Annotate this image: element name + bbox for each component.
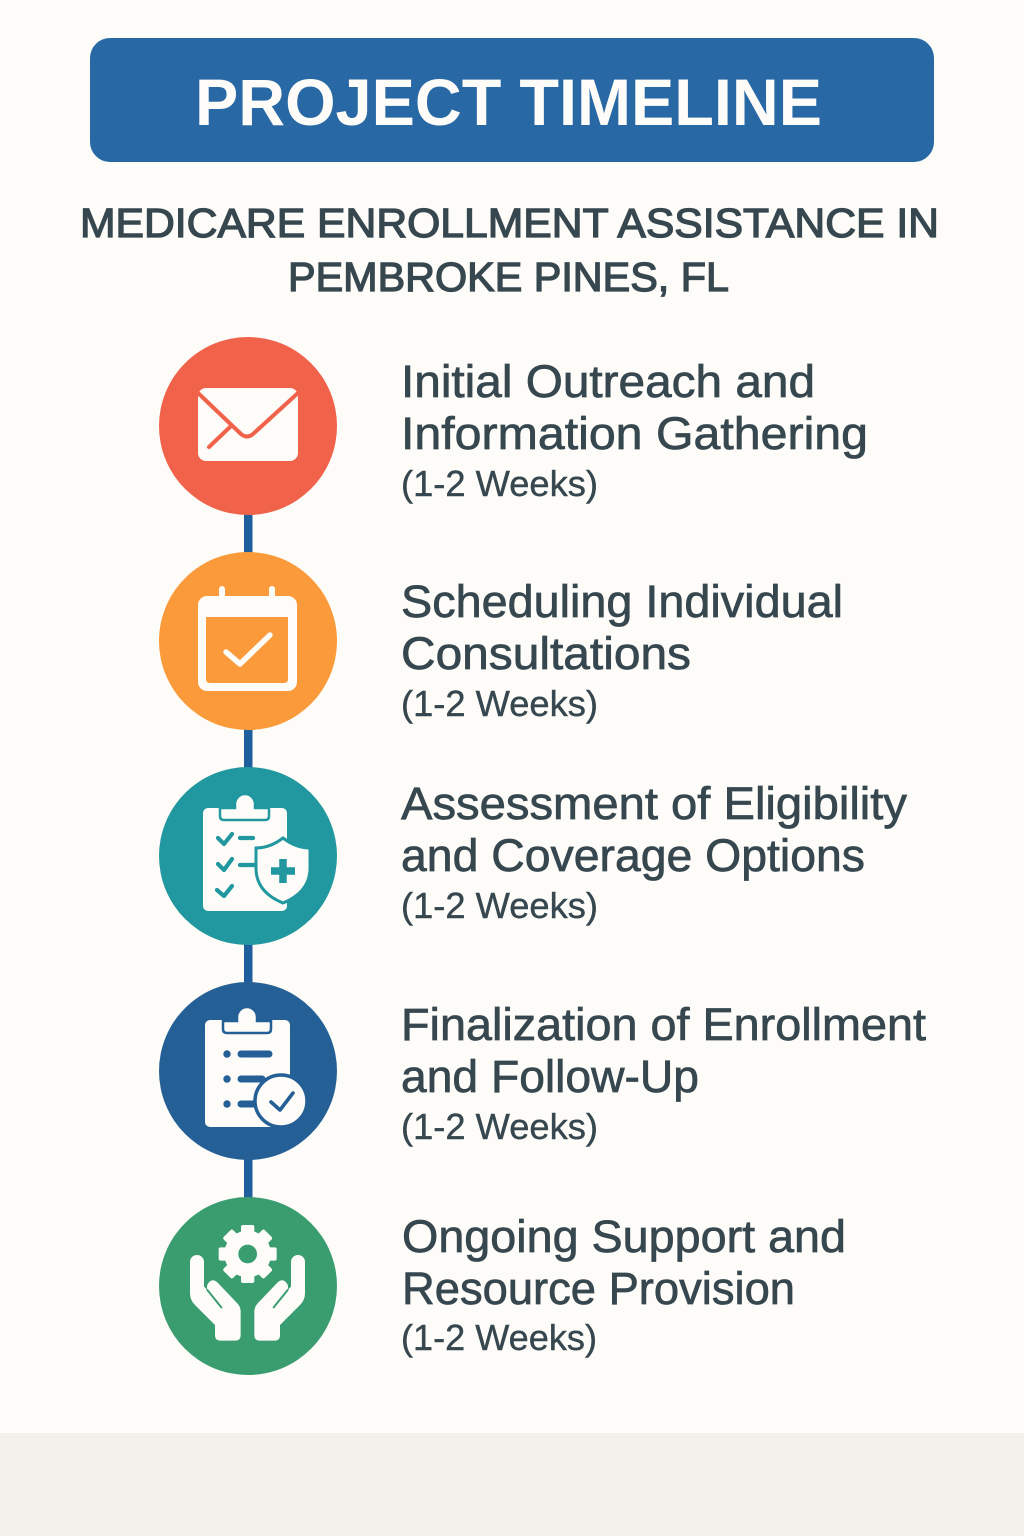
step 4 text: (1-2 Weeks) <box>401 1106 598 1147</box>
icon: clipboard with shield <box>159 767 337 945</box>
timeline connector line <box>244 500 252 1210</box>
title banner: PROJECT TIMELINE <box>195 65 822 139</box>
step 3 text: Assessment of Eligibility <box>401 778 908 829</box>
step 3: assessment of eligibility <box>159 767 908 945</box>
step 2 text: Consultations <box>401 628 691 679</box>
step 3 text <box>401 778 908 926</box>
step 1 text <box>401 356 868 504</box>
subtitle <box>80 200 939 300</box>
step 5 text: Resource Provision <box>402 1263 795 1314</box>
step 5 text: Ongoing Support and <box>402 1211 846 1262</box>
step 2 text: (1-2 Weeks) <box>401 683 598 724</box>
icon: clipboard with check badge <box>159 982 337 1160</box>
step 5 text: (1-2 Weeks) <box>401 1317 597 1358</box>
step 1 text: Initial Outreach and <box>401 356 815 407</box>
step 4 text <box>401 999 927 1147</box>
step 1: initial outreach <box>159 337 868 515</box>
step 2: scheduling consultations <box>159 552 843 730</box>
subtitle: PEMBROKE PINES, FL <box>288 254 729 300</box>
title banner <box>90 38 934 162</box>
step 4 text: Finalization of Enrollment <box>401 999 927 1050</box>
step 5 text <box>401 1211 846 1358</box>
icon: calendar with check <box>159 552 337 730</box>
step 2 text: Scheduling Individual <box>401 576 843 627</box>
step 3 text: (1-2 Weeks) <box>401 885 598 926</box>
icon: envelope <box>159 337 337 515</box>
step 4 text: and Follow-Up <box>401 1051 699 1102</box>
step 1 text: (1-2 Weeks) <box>401 463 598 504</box>
icon: hands holding gear <box>159 1197 337 1375</box>
step 1 text: Information Gathering <box>401 408 868 459</box>
step 5: ongoing support <box>159 1197 846 1375</box>
subtitle: MEDICARE ENROLLMENT ASSISTANCE IN <box>80 200 939 246</box>
step 3 text: and Coverage Options <box>401 830 865 881</box>
step 4: finalization of enrollment <box>159 982 927 1160</box>
step 2 text <box>401 576 843 724</box>
